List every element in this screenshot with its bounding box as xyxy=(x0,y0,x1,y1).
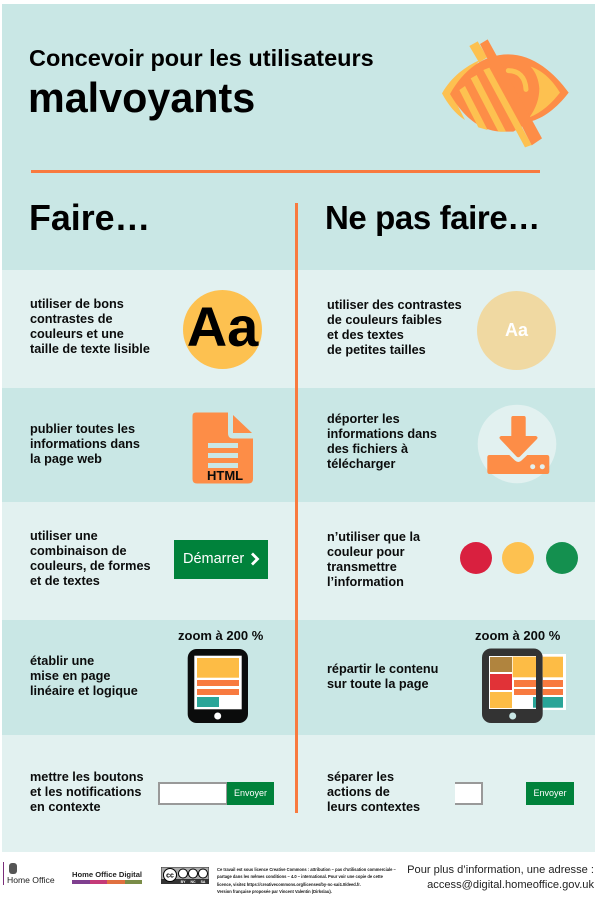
text: do 5: mettre les boutons xyxy=(30,770,144,784)
icon: Creative Commons badge: NC xyxy=(190,880,196,884)
text: licence: Version française proposée par Vincent Valentin (Dirkslau). xyxy=(217,889,332,894)
icon: Creative Commons badge: cc xyxy=(166,872,174,880)
text: do 4: mise en page xyxy=(30,669,110,683)
text: dont 4: sur toute la page xyxy=(327,677,429,691)
text: licence: licence, visitez https://creativecommons.org/licenses/by-nc-sa/4.0/deed.fr. xyxy=(217,882,361,887)
form: input xyxy=(455,782,483,805)
icon: Creative Commons badge xyxy=(161,867,209,884)
text: dont 4 xyxy=(327,662,438,691)
text: dont 2: informations dans xyxy=(327,427,437,441)
divider: vertical orange rule xyxy=(295,203,298,813)
panel: header background xyxy=(2,4,595,270)
text: do 1: utiliser de bons xyxy=(30,297,124,311)
icon: download xyxy=(478,404,556,484)
icon: high contrast Aa: Aa xyxy=(187,295,258,358)
logo: Home Office Digital: Home Office Digital xyxy=(72,870,142,879)
text: do 3: et de textes xyxy=(30,574,100,588)
icon: HTML document xyxy=(192,412,253,484)
icon: Creative Commons badge: SA xyxy=(201,880,206,884)
icon: low contrast Aa: Aa xyxy=(505,320,528,340)
text: dont 2: des fichiers à xyxy=(327,442,408,456)
text: licence xyxy=(217,867,396,894)
text: do 1 xyxy=(30,297,150,356)
form: detached button xyxy=(526,782,574,805)
icon: red circle xyxy=(460,542,492,574)
text: dont 3 xyxy=(327,530,420,589)
text: dont 5 xyxy=(327,770,420,814)
text: dont 5: séparer les xyxy=(327,770,394,784)
icon: green circle xyxy=(546,542,578,574)
text: do 3: combinaison de xyxy=(30,544,127,558)
text: licence: Ce travail est sous licence Creative Commons : attribution – pas d’utilisation commerciale – xyxy=(217,867,396,872)
text: do 3: utiliser une xyxy=(30,529,98,543)
logo: Home Office Digital xyxy=(72,870,142,884)
form: detached button: Envoyer xyxy=(533,788,567,798)
text: do 5: en contexte xyxy=(30,800,101,814)
text: do 3: couleurs, de formes xyxy=(30,559,151,573)
text: contact xyxy=(407,864,594,891)
text: do 2: la page web xyxy=(30,452,102,466)
text: dont 2: déporter les xyxy=(327,412,400,426)
icon: HTML document: HTML xyxy=(207,468,243,483)
text: dont 1 xyxy=(327,298,462,357)
text: dont 3: couleur pour xyxy=(327,545,405,559)
logo: Home Office xyxy=(3,862,57,885)
text: contact: access@digital.homeoffice.gov.uk xyxy=(427,879,594,891)
logo: Home Office: Home Office xyxy=(7,875,55,885)
icon: tablet linear layout xyxy=(188,649,248,723)
text: dont 2: télécharger xyxy=(327,457,395,471)
text: dont 1: et des textes xyxy=(327,328,404,342)
label: zoom dont: zoom à 200 % xyxy=(475,628,560,643)
text: dont 1: utiliser des contrastes xyxy=(327,298,462,312)
text: dont 3: transmettre xyxy=(327,560,397,574)
title xyxy=(28,45,374,121)
band row 3 xyxy=(2,502,595,620)
text: licence: partage dans les mêmes conditions – 4.0 – international. Pour voir une copie de cette xyxy=(217,874,383,879)
heading: Ne pas faire: Ne pas faire… xyxy=(325,199,540,236)
label: zoom do: zoom à 200 % xyxy=(178,628,263,643)
text: dont 5: actions de xyxy=(327,785,390,799)
text: do 5 xyxy=(30,770,144,814)
text: do 4 xyxy=(30,654,138,698)
text: dont 5: leurs contextes xyxy=(327,800,420,814)
text: dont 3: n’utiliser que la xyxy=(327,530,420,544)
text: contact: Pour plus d’information, une adresse : xyxy=(407,864,594,876)
text: dont 3: l’information xyxy=(327,575,404,589)
band row 1 xyxy=(2,270,595,388)
text: do 4: linéaire et logique xyxy=(30,684,138,698)
form: input joined to button: Envoyer xyxy=(234,788,267,798)
icon: crossed-out eye xyxy=(442,39,569,148)
icon: low contrast Aa xyxy=(477,291,556,370)
button: Démarrer xyxy=(174,540,268,579)
title: malvoyants xyxy=(28,75,255,121)
band row 4 xyxy=(2,620,595,735)
icon: Creative Commons badge: BY xyxy=(181,880,186,884)
text: do 2: informations dans xyxy=(30,437,140,451)
text: dont 1: de petites tailles xyxy=(327,343,426,357)
text: do 2: publier toutes les xyxy=(30,422,135,436)
text: do 3 xyxy=(30,529,151,588)
text: do 2 xyxy=(30,422,140,466)
form: input joined to button xyxy=(158,782,274,805)
text: do 4: établir une xyxy=(30,654,94,668)
text: do 1: taille de texte lisible xyxy=(30,342,150,356)
text: dont 1: de couleurs faibles xyxy=(327,313,442,327)
text: do 1: couleurs et une xyxy=(30,327,124,341)
text: dont 4: répartir le contenu xyxy=(327,662,438,676)
icon: yellow circle xyxy=(502,542,534,574)
title: Concevoir pour les utilisateurs xyxy=(29,45,374,71)
button: Démarrer: Démarrer xyxy=(183,551,244,567)
divider: horizontal orange rule xyxy=(31,170,540,173)
heading: Faire: Faire… xyxy=(29,198,150,238)
band row 5 xyxy=(2,735,595,852)
band row 2 xyxy=(2,388,595,502)
text: do 5: et les notifications xyxy=(30,785,141,799)
icon: tablet overflowing layout xyxy=(482,648,566,723)
text: do 1: contrastes de xyxy=(30,312,112,326)
text: dont 2 xyxy=(327,412,437,471)
